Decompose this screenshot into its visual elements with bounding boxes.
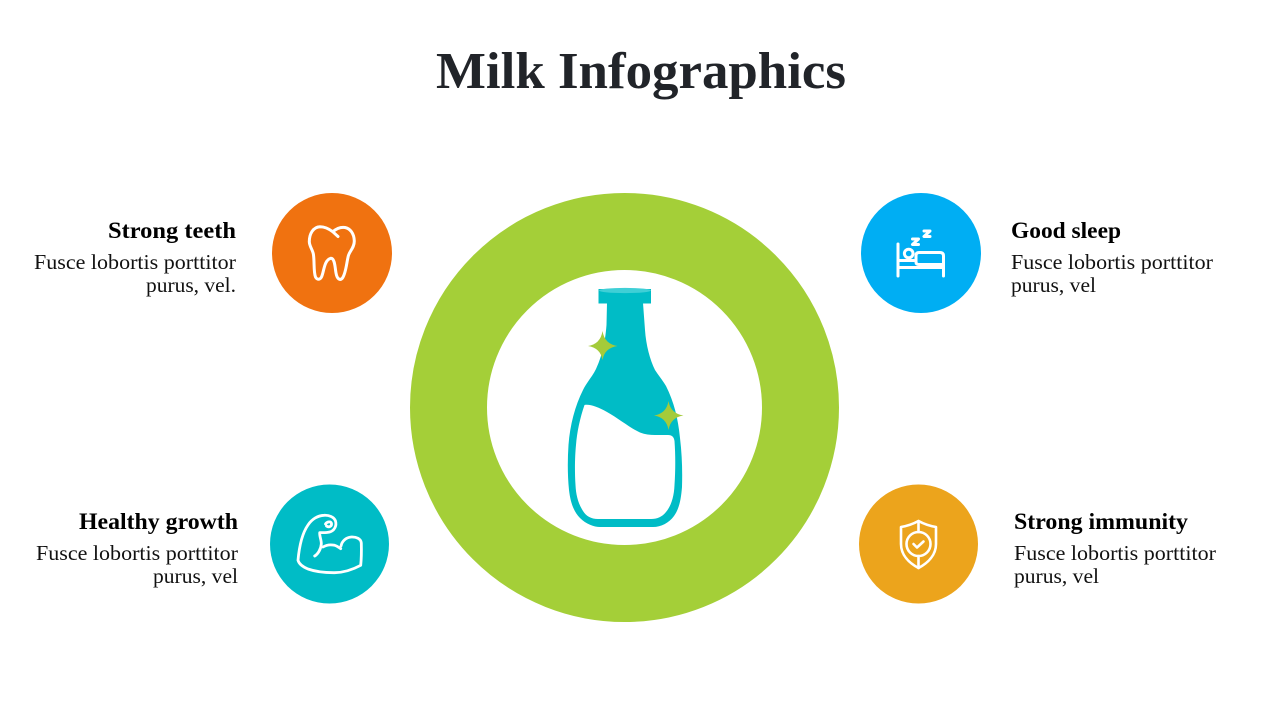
description: Fusce lobortis porttitor [36, 541, 238, 565]
orange circle [272, 193, 392, 313]
heading: Strong immunity [1014, 509, 1189, 534]
item: good sleep [861, 193, 1213, 313]
item: strong teeth [34, 193, 392, 313]
description [36, 541, 238, 588]
item: strong immunity [859, 484, 1216, 604]
icon: bed with zzz [898, 231, 944, 276]
yellow circle [859, 484, 978, 604]
title: Milk Infographics [436, 43, 846, 100]
icon: shield with check [901, 521, 936, 568]
description: Fusce lobortis porttitor [1011, 250, 1213, 274]
heading: Healthy growth [79, 509, 238, 534]
description [34, 250, 236, 297]
description: purus, vel. [146, 273, 236, 297]
sparkles [588, 331, 684, 430]
green ring [448, 232, 800, 584]
blue circle [861, 193, 981, 313]
description: purus, vel [1011, 273, 1096, 297]
icon: tooth [309, 227, 354, 279]
description [1014, 541, 1216, 588]
center graphic: ring with milk bottle [448, 232, 800, 584]
icon: flexed arm [298, 515, 361, 573]
item: healthy growth [36, 484, 389, 604]
heading: Strong teeth [108, 218, 236, 243]
teal circle [270, 484, 389, 604]
heading: Good sleep [1011, 218, 1121, 243]
icon: milk bottle [568, 288, 684, 527]
description: purus, vel [1014, 564, 1099, 588]
description: Fusce lobortis porttitor [34, 250, 236, 274]
description [1011, 250, 1213, 297]
description: purus, vel [153, 564, 238, 588]
description: Fusce lobortis porttitor [1014, 541, 1216, 565]
